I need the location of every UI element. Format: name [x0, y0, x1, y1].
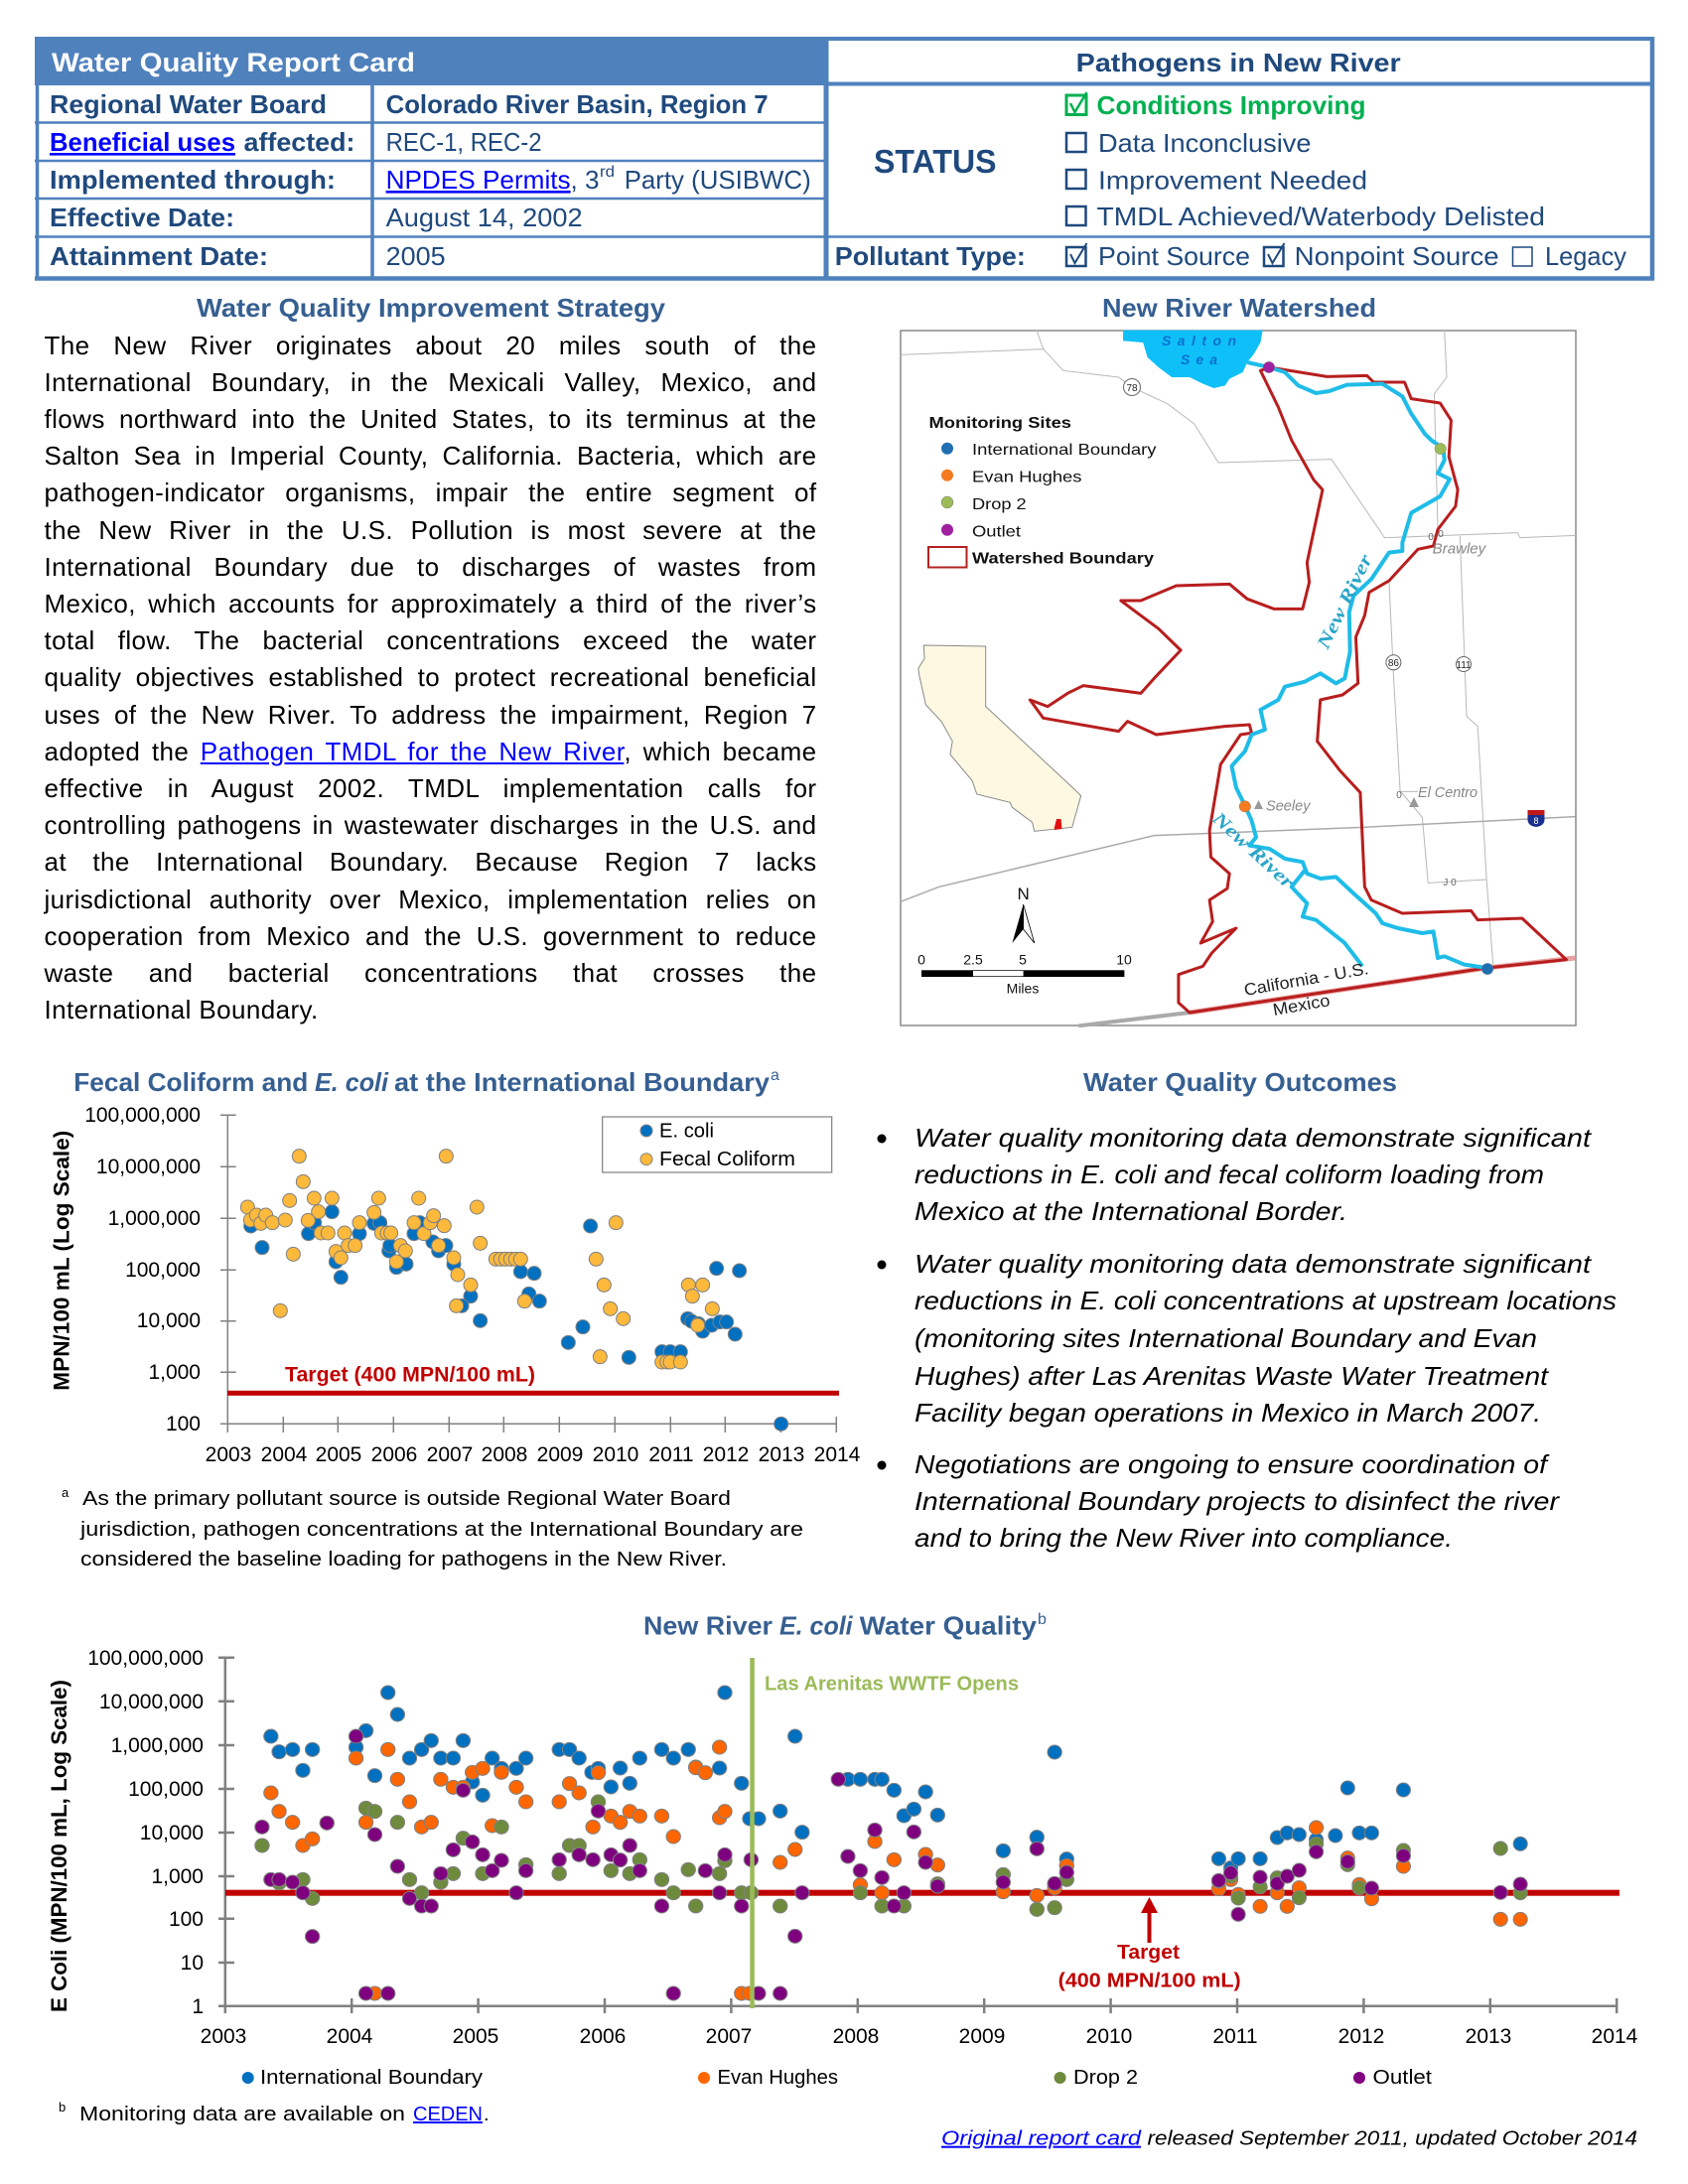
unchecked: Data Inconclusive: Data Inconclusive: [1098, 128, 1311, 158]
panel: left table grid: [35, 37, 1654, 280]
footnote b: b: [59, 2100, 66, 2115]
y axis labels: 10,000,000: [96, 1156, 201, 1178]
x axis labels: 2005: [316, 1443, 361, 1466]
road shield numbers: 111: [1456, 660, 1472, 671]
report card release note: [941, 2128, 1637, 2150]
bullet 3: International Boundary projects to disinfect the river: [914, 1486, 1560, 1516]
left table text rows: NPDES Permits: [386, 165, 571, 195]
y axis labels: 100,000: [125, 1259, 201, 1282]
bullet 2: Hughes) after Las Arenitas Waste Water Treatment: [914, 1361, 1550, 1391]
map legend: [928, 415, 1156, 568]
x axis labels: [206, 1443, 861, 1466]
footnote a: [62, 1485, 803, 1570]
target callout: [1058, 1942, 1241, 1992]
outcomes bullet list: [878, 1123, 1617, 1553]
left table text rows: rd: [600, 164, 615, 181]
strategy paragraph: at the International Boundary. Because Region 7 lacks: [44, 847, 816, 877]
series: Evan Hughes: [264, 1740, 1527, 2000]
road number marks: [1396, 529, 1457, 888]
series: International Boundary: [264, 1686, 1527, 1875]
scale bar: Miles: [1007, 981, 1039, 997]
site marker: Outlet: [1263, 361, 1275, 373]
y axis title: MPN/100 mL (Log Scale): [49, 1131, 73, 1391]
footnote b: [59, 2100, 490, 2125]
city labels: Brawley: [1433, 540, 1487, 557]
bullet 1: Mexico at the International Border.: [914, 1196, 1347, 1226]
strategy paragraph: Mexico, which accounts for approximately a third of the river’s: [44, 589, 816, 618]
left table text rows: [50, 89, 811, 271]
strategy paragraph: cooperation from Mexico and the U.S. government to reduce: [44, 921, 816, 951]
pollutant type row: Legacy: [1545, 241, 1626, 271]
bullet 2: Water quality monitoring data demonstrate significant: [914, 1249, 1593, 1279]
y axis labels: 1,000,000: [111, 1734, 204, 1757]
river: [1231, 362, 1486, 968]
strategy paragraph: quality objectives established to protect recreational beneficial: [44, 662, 816, 692]
left table text rows: August 14, 2002: [386, 203, 583, 232]
target callout: Target: [1117, 1942, 1180, 1964]
x axis labels: 2006: [371, 1443, 417, 1466]
series: Drop 2: [255, 1795, 1527, 1916]
heading: New River E. coli Water Quality: Water Quality: [860, 1611, 1038, 1641]
chart legend: International Boundary: [260, 2067, 483, 2089]
x axis labels: 2003: [206, 1443, 251, 1466]
y axis labels: 1,000: [148, 1361, 201, 1384]
strategy paragraph: adopted the Pathogen TMDL for the New River, which became: [44, 737, 817, 766]
map legend: Watershed Boundary: [972, 551, 1154, 568]
header bar: Water Quality Report Card: Water Quality Report Card: [52, 48, 415, 77]
x axis labels: 2003: [201, 2025, 246, 2048]
bullet 1: reductions in E. coli and fecal coliform loading from: [914, 1160, 1544, 1189]
label: New River lower: New River: [1207, 807, 1298, 893]
x axis labels: 2013: [759, 1443, 804, 1466]
x axis labels: 2012: [1338, 2025, 1384, 2048]
heading: New River E. coli Water Quality: b: [1038, 1611, 1047, 1628]
x axis labels: 2005: [453, 2025, 498, 2048]
strategy paragraph: the New River in the U.S. Pollution is most severe at the: [44, 515, 816, 545]
map: New River watershed: [901, 331, 1576, 1025]
heading: Fecal Coliform and E. coli at the International Boundary: at the International Boundary: [394, 1067, 771, 1097]
target callout: (400 MPN/100 mL): [1058, 1971, 1241, 1992]
y axis labels: 100,000,000: [87, 1647, 204, 1670]
x axis labels: 2011: [648, 1443, 694, 1466]
city labels: [1254, 540, 1487, 815]
chart legend: Evan Hughes: [717, 2067, 838, 2089]
x axis labels: 2010: [593, 1443, 638, 1466]
footnote a: jurisdiction, pathogen concentrations at the International Boundary are: [79, 1519, 803, 1541]
x axis labels: 2008: [482, 1443, 527, 1466]
footnote a: a: [62, 1485, 70, 1500]
y axis labels: [87, 1647, 204, 2018]
status label: STATUS: [874, 143, 997, 180]
road shield numbers: 86: [1388, 658, 1399, 669]
bullet 2: reductions in E. coli concentrations at upstream locations: [914, 1286, 1617, 1315]
series: Outlet: [255, 1729, 1527, 2000]
footnote a: As the primary pollutant source is outside Regional Water Board: [82, 1488, 731, 1510]
x axis labels: 2011: [1212, 2025, 1258, 2048]
label: Salton Sea: Sea: [1181, 351, 1217, 367]
left table text rows: REC-1, REC-2: [386, 127, 542, 157]
Las Arenitas label: Las Arenitas WWTF Opens: [765, 1674, 1019, 1696]
road number marks: J 0: [1443, 878, 1457, 888]
scale bar: 5: [1019, 952, 1027, 968]
scale bar: 10: [1116, 952, 1132, 968]
bullet 1: Water quality monitoring data demonstrate significant: [914, 1123, 1593, 1153]
y axis labels: 1,000: [151, 1865, 204, 1888]
x axis labels: 2004: [327, 2025, 373, 2048]
pollutant type row: Pollutant Type:: [835, 241, 1026, 271]
target label: Target (400 MPN/100 mL): [285, 1364, 535, 1387]
y axis labels: 100,000,000: [84, 1104, 201, 1127]
x axis labels: 2004: [261, 1443, 308, 1466]
target line: [227, 1391, 839, 1396]
bullet 3: Negotiations are ongoing to ensure coordination of: [914, 1449, 1550, 1479]
left table text rows: Beneficial uses: [50, 127, 235, 157]
y axis labels: 10,000: [140, 1822, 204, 1844]
heading: Fecal Coliform and E. coli at the International Boundary: a: [771, 1067, 779, 1084]
bullet 2: Facility began operations in Mexico in March 2007.: [914, 1398, 1541, 1428]
left table text rows: Implemented through:: [50, 165, 336, 195]
label: New River upper: New River: [1313, 551, 1377, 653]
x axis labels: 2009: [537, 1443, 583, 1466]
strategy paragraph: International Boundary, in the Mexicali Valley, Mexico, and: [44, 367, 816, 397]
y axis labels: 100: [166, 1413, 201, 1435]
pollutant type row: Point Source: [1098, 241, 1250, 271]
left table text rows: Colorado River Basin, Region 7: [386, 89, 769, 119]
chart legend: Drop 2: [1073, 2067, 1138, 2089]
label: Salton Sea: [1162, 333, 1236, 367]
left table text rows: , 3: [570, 165, 600, 195]
road number marks: 0: [1396, 790, 1402, 801]
unchecked: Improvement Needed: Improvement Needed: [1098, 165, 1367, 195]
city labels: Seeley: [1266, 798, 1312, 815]
chart legend: Fecal Coliform: [659, 1149, 795, 1170]
heading: Water Quality Outcomes: Water Quality Outcomes: [1083, 1067, 1397, 1097]
bullet 2: (monitoring sites International Boundary and Evan: [914, 1323, 1537, 1353]
strategy paragraph: The New River originates about 20 miles south of the: [44, 330, 816, 359]
unchecked: TMDL Achieved: TMDL Achieved/Waterbody Delisted: [1096, 202, 1545, 231]
north arrow: [1012, 885, 1035, 943]
road shield numbers: [1126, 383, 1472, 671]
x axis labels: 2012: [703, 1443, 749, 1466]
heading: Fecal Coliform and E. coli at the International Boundary: [73, 1067, 779, 1097]
heading: New River E. coli Water Quality: New River: [643, 1611, 773, 1641]
x axis labels: 2014: [814, 1443, 861, 1466]
report card release note: Original report card: [941, 2128, 1142, 2150]
left table text rows: Regional Water Board: [50, 89, 327, 119]
y axis labels: 1,000,000: [108, 1207, 201, 1230]
bullet 2: [878, 1249, 1617, 1428]
interstate shield: 8: [1533, 816, 1539, 826]
y axis labels: 10: [181, 1952, 204, 1975]
border line: [1078, 1013, 1190, 1025]
site marker: International Boundary: [1481, 963, 1493, 975]
footnote b: Monitoring data are available on: [79, 2104, 405, 2125]
heading: New River Watershed: New River Watershed: [1102, 293, 1376, 323]
map legend: Evan Hughes: [972, 470, 1082, 486]
x axis labels: 2006: [580, 2025, 626, 2048]
strategy paragraph: flows northward into the United States, to its terminus at the: [44, 404, 816, 434]
north arrow: N: [1017, 885, 1030, 903]
footnote a: considered the baseline loading for pathogens in the New River.: [80, 1549, 727, 1570]
left table text rows: Effective Date:: [50, 203, 234, 232]
inset marker: [1055, 819, 1061, 830]
axes: [220, 1115, 836, 1433]
x axis labels: 2010: [1086, 2025, 1132, 2048]
Salton Sea: [1123, 331, 1263, 388]
road number marks: 0: [1438, 529, 1444, 540]
watershed boundary: [1030, 367, 1567, 1013]
roads: [901, 331, 1576, 966]
road shields: [1124, 379, 1472, 671]
site marker: Evan Hughes: [1239, 801, 1251, 812]
x axis labels: 2008: [833, 2025, 879, 2048]
site marker: Drop 2: [1435, 443, 1447, 455]
road number marks: 0: [1428, 532, 1434, 543]
label: Mexico: Mexico: [1271, 991, 1332, 1020]
heading: Water Quality Improvement Strategy: Water Quality Improvement Strategy: [197, 293, 666, 323]
left table text rows: Attainment Date:: [50, 241, 268, 271]
checked: Conditions Improving: Conditions Improving: [1096, 90, 1366, 120]
y axis title: E Coli (MPN/100 mL, Log Scale): [47, 1680, 71, 2012]
strategy paragraph: [44, 330, 817, 1024]
strategy paragraph: controlling pathogens in wastewater discharges in the U.S. and: [44, 810, 816, 840]
arrow: target: [1141, 1897, 1158, 1943]
x axis labels: 2007: [427, 1443, 473, 1466]
border halo: [1190, 958, 1575, 1013]
road shield numbers: 78: [1126, 383, 1138, 394]
report card release note: released September 2011, updated October 2014: [1148, 2128, 1637, 2150]
chart legend: [603, 1117, 832, 1172]
target line: [225, 1890, 1619, 1896]
left table text rows: affected:: [244, 127, 355, 157]
scale bar: 0: [917, 952, 925, 968]
label: Salton Sea: Salton: [1162, 333, 1236, 348]
footnote b: CEDEN: [413, 2104, 483, 2125]
y axis labels: [84, 1104, 201, 1435]
y axis labels: 100,000: [128, 1778, 204, 1801]
left table text rows: Party (USIBWC): [625, 165, 811, 195]
chart legend: Outlet: [1372, 2067, 1432, 2089]
report card table: [35, 37, 1654, 280]
heading: Fecal Coliform and E. coli at the International Boundary: Fecal Coliform and: [73, 1067, 308, 1097]
y axis labels: 1: [192, 1995, 204, 2018]
series: E. coli: [244, 1205, 788, 1431]
strategy paragraph: International Boundary due to discharges of wastes from: [44, 552, 816, 582]
heading: New River E. coli Water Quality: [643, 1611, 1047, 1641]
strategy paragraph: total flow. The bacterial concentrations exceed the water: [44, 625, 816, 655]
x axis labels: 2009: [959, 2025, 1005, 2048]
city labels: El Centro: [1418, 784, 1477, 801]
map legend: Monitoring Sites: [929, 415, 1071, 432]
left table text rows: 2005: [386, 241, 446, 271]
strategy paragraph: Salton Sea in Imperial County, California. Bacteria, which are: [44, 441, 816, 471]
bullet 1: [878, 1123, 1593, 1226]
interstate shield: [1527, 810, 1545, 827]
x axis labels: 2007: [706, 2025, 752, 2048]
x axis labels: 2014: [1592, 2025, 1638, 2048]
label: California - U.S.: California - U.S.: [1242, 959, 1370, 1000]
chart legend: [242, 2067, 1432, 2089]
header bar: Water Quality Report Card: [35, 37, 827, 85]
panel title: Pathogens in New River: Pathogens in New River: [1076, 48, 1401, 77]
bullet 3: and to bring the New River into compliance.: [914, 1523, 1453, 1553]
chart legend: E. coli: [659, 1121, 714, 1143]
status checklist: [1066, 90, 1545, 231]
scale bar: [917, 952, 1132, 997]
strategy paragraph: effective in August 2002. TMDL implementation calls for: [44, 773, 816, 803]
footnote b: .: [484, 2104, 490, 2125]
x axis labels: [201, 2025, 1638, 2048]
scale bar: 2.5: [963, 952, 983, 968]
Las Arenitas marker line: [750, 1658, 755, 2008]
series: Fecal Coliform: [240, 1150, 719, 1369]
chart: Fecal Coliform and E. coli: [49, 1104, 861, 1466]
strategy paragraph: International Boundary.: [44, 995, 319, 1024]
chart: New River E. coli: [47, 1647, 1638, 2089]
strategy paragraph: pathogen-indicator organisms, impair the entire segment of: [44, 478, 816, 507]
map legend: Drop 2: [972, 496, 1027, 513]
y axis labels: 100: [169, 1908, 204, 1931]
axes: [218, 1658, 1617, 2013]
pollutant type row: [835, 241, 1626, 271]
heading: New River E. coli Water Quality: E. coli: [779, 1611, 853, 1641]
bullet 3: [878, 1449, 1560, 1553]
y axis labels: 10,000: [137, 1309, 201, 1332]
strategy paragraph: waste and bacterial concentrations that crosses the: [44, 958, 816, 988]
strategy paragraph: jurisdictional authority over Mexico, implementation relies on: [44, 885, 816, 914]
y axis labels: 10,000,000: [99, 1691, 204, 1713]
strategy paragraph: uses of the New River. To address the impairment, Region 7: [44, 700, 816, 730]
map legend: Outlet: [972, 524, 1022, 541]
x axis labels: 2013: [1466, 2025, 1511, 2048]
heading: Fecal Coliform and E. coli at the International Boundary: E. coli: [315, 1067, 389, 1097]
pollutant type row: Nonpoint Source: [1295, 241, 1499, 271]
inset map: California: [918, 645, 1081, 831]
map legend: International Boundary: [972, 442, 1156, 459]
